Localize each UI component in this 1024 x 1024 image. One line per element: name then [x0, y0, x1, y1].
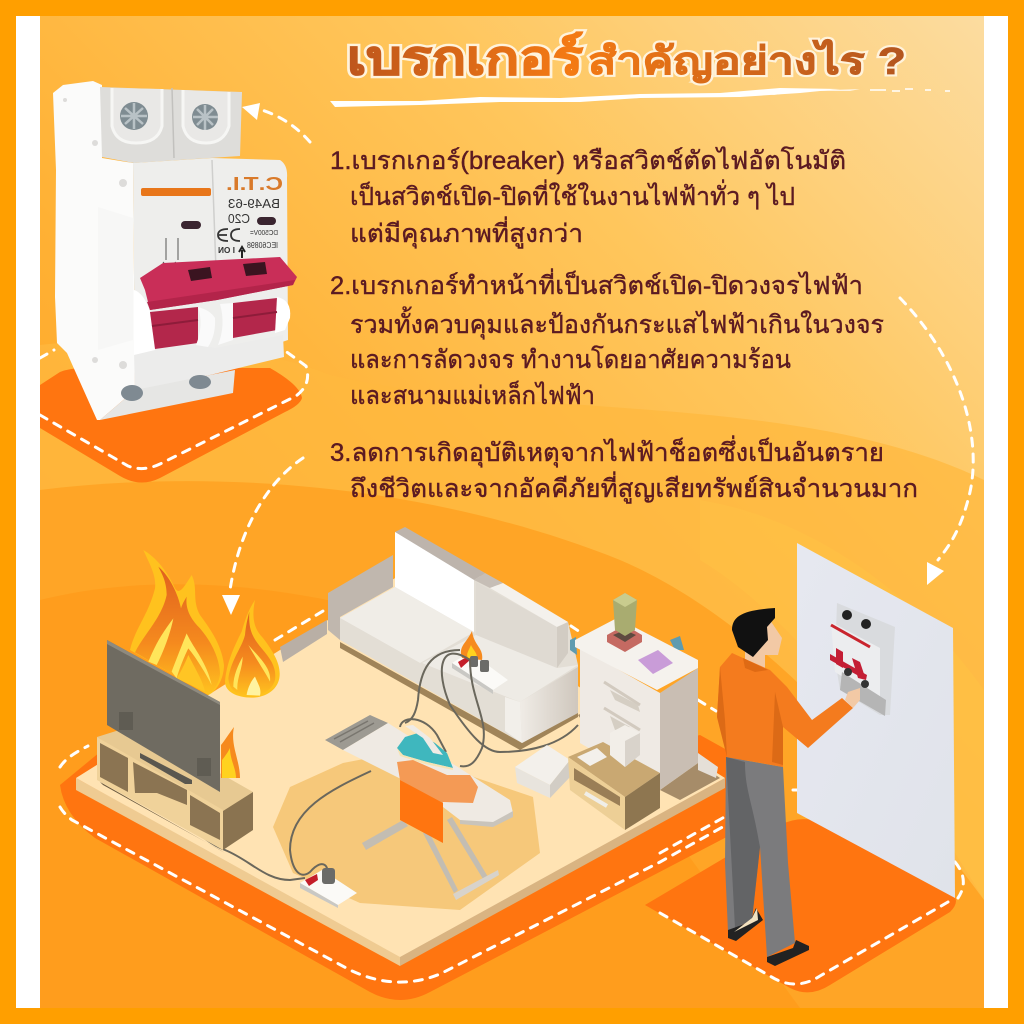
cables: [165, 650, 578, 880]
floor: [76, 575, 725, 966]
rug: [273, 752, 540, 910]
brand label: DC500V=: [250, 230, 278, 237]
brand label: C.T.I.: [226, 174, 283, 194]
title: [347, 31, 906, 84]
body text: 1.เบรกเกอร์(breaker) หรือสวิตช์ตัดไฟอัตโนมัติ: [330, 146, 846, 175]
screws: [120, 102, 218, 130]
wall breaker: [830, 603, 895, 716]
arrow: to fire: [222, 458, 303, 615]
tv stand: [97, 725, 253, 853]
sofa: [328, 527, 578, 750]
brand label: I ON: [218, 246, 235, 255]
ironing board: [325, 715, 513, 900]
lower screws: [100, 370, 235, 420]
brand label: C20: [228, 211, 250, 226]
hand: [845, 688, 860, 708]
pen cup: [610, 725, 640, 767]
plant: [607, 593, 642, 652]
fire: large flames: [130, 550, 280, 698]
title: เบรกเกอร์: [347, 31, 583, 84]
iron: [397, 725, 453, 770]
body text: [330, 146, 918, 504]
hair: [732, 608, 775, 657]
arrow: product connector: [242, 103, 310, 142]
body text: และการลัดวงจร ทำงานโดยอาศัยความร้อน: [350, 345, 791, 374]
platform: room: [60, 608, 798, 1000]
person: [717, 608, 860, 966]
brand label: [163, 174, 283, 274]
body text: เป็นสวิตช์เปิด-ปิดที่ใช้ในงานไฟฟ้าทั่ว ๆ ไป: [350, 179, 795, 211]
body text: แต่มีคุณภาพที่สูงกว่า: [350, 216, 583, 249]
cabinet: [570, 593, 718, 790]
platform: wall: [645, 819, 963, 992]
shirt: [397, 760, 478, 843]
shoes: [728, 908, 809, 966]
body text: ถึงชีวิตและจากอัคคีภัยที่สูญเสียทรัพย์สินจำนวนมาก: [350, 471, 918, 504]
title underline brush stroke: [330, 88, 950, 107]
title: สำคัญอย่างไร ?: [588, 39, 906, 83]
sleeves and rockers: [134, 290, 155, 355]
product: circuit breaker: [53, 81, 297, 420]
nightstand: [568, 725, 660, 830]
power strip with fire on sofa: [452, 631, 508, 694]
book: [638, 650, 673, 674]
power strip on floor: [300, 868, 357, 908]
arrow: to wall breaker: [900, 298, 973, 585]
red lever: [140, 257, 297, 310]
wall: [797, 543, 955, 898]
shirt: [717, 653, 853, 767]
body text: และสนามแม่เหล็กไฟฟ้า: [350, 380, 595, 410]
brand label: BA49-63: [228, 196, 280, 211]
title: สำคัญอย่างไร ?: [588, 39, 906, 83]
title: เบรกเกอร์: [347, 31, 583, 84]
fire: behind tv: [221, 727, 240, 778]
neck and face: [745, 620, 782, 670]
body text: รวมทั้งควบคุมและป้องกันกระแสไฟฟ้าเกินในวงจร: [350, 306, 884, 340]
ottoman: [515, 745, 570, 798]
body text: 3.ลดการเกิดอุบัติเหตุจากไฟฟ้าช็อตซึ่งเป็นอันตราย: [330, 435, 884, 468]
body text: 2.เบรกเกอร์ทำหน้าที่เป็นสวิตช์เปิด-ปิดวงจรไฟฟ้า: [330, 268, 863, 300]
tv: [107, 640, 220, 792]
brand label: IEC60898: [247, 241, 278, 250]
legs: [725, 757, 795, 957]
platform: breaker: [40, 350, 308, 483]
